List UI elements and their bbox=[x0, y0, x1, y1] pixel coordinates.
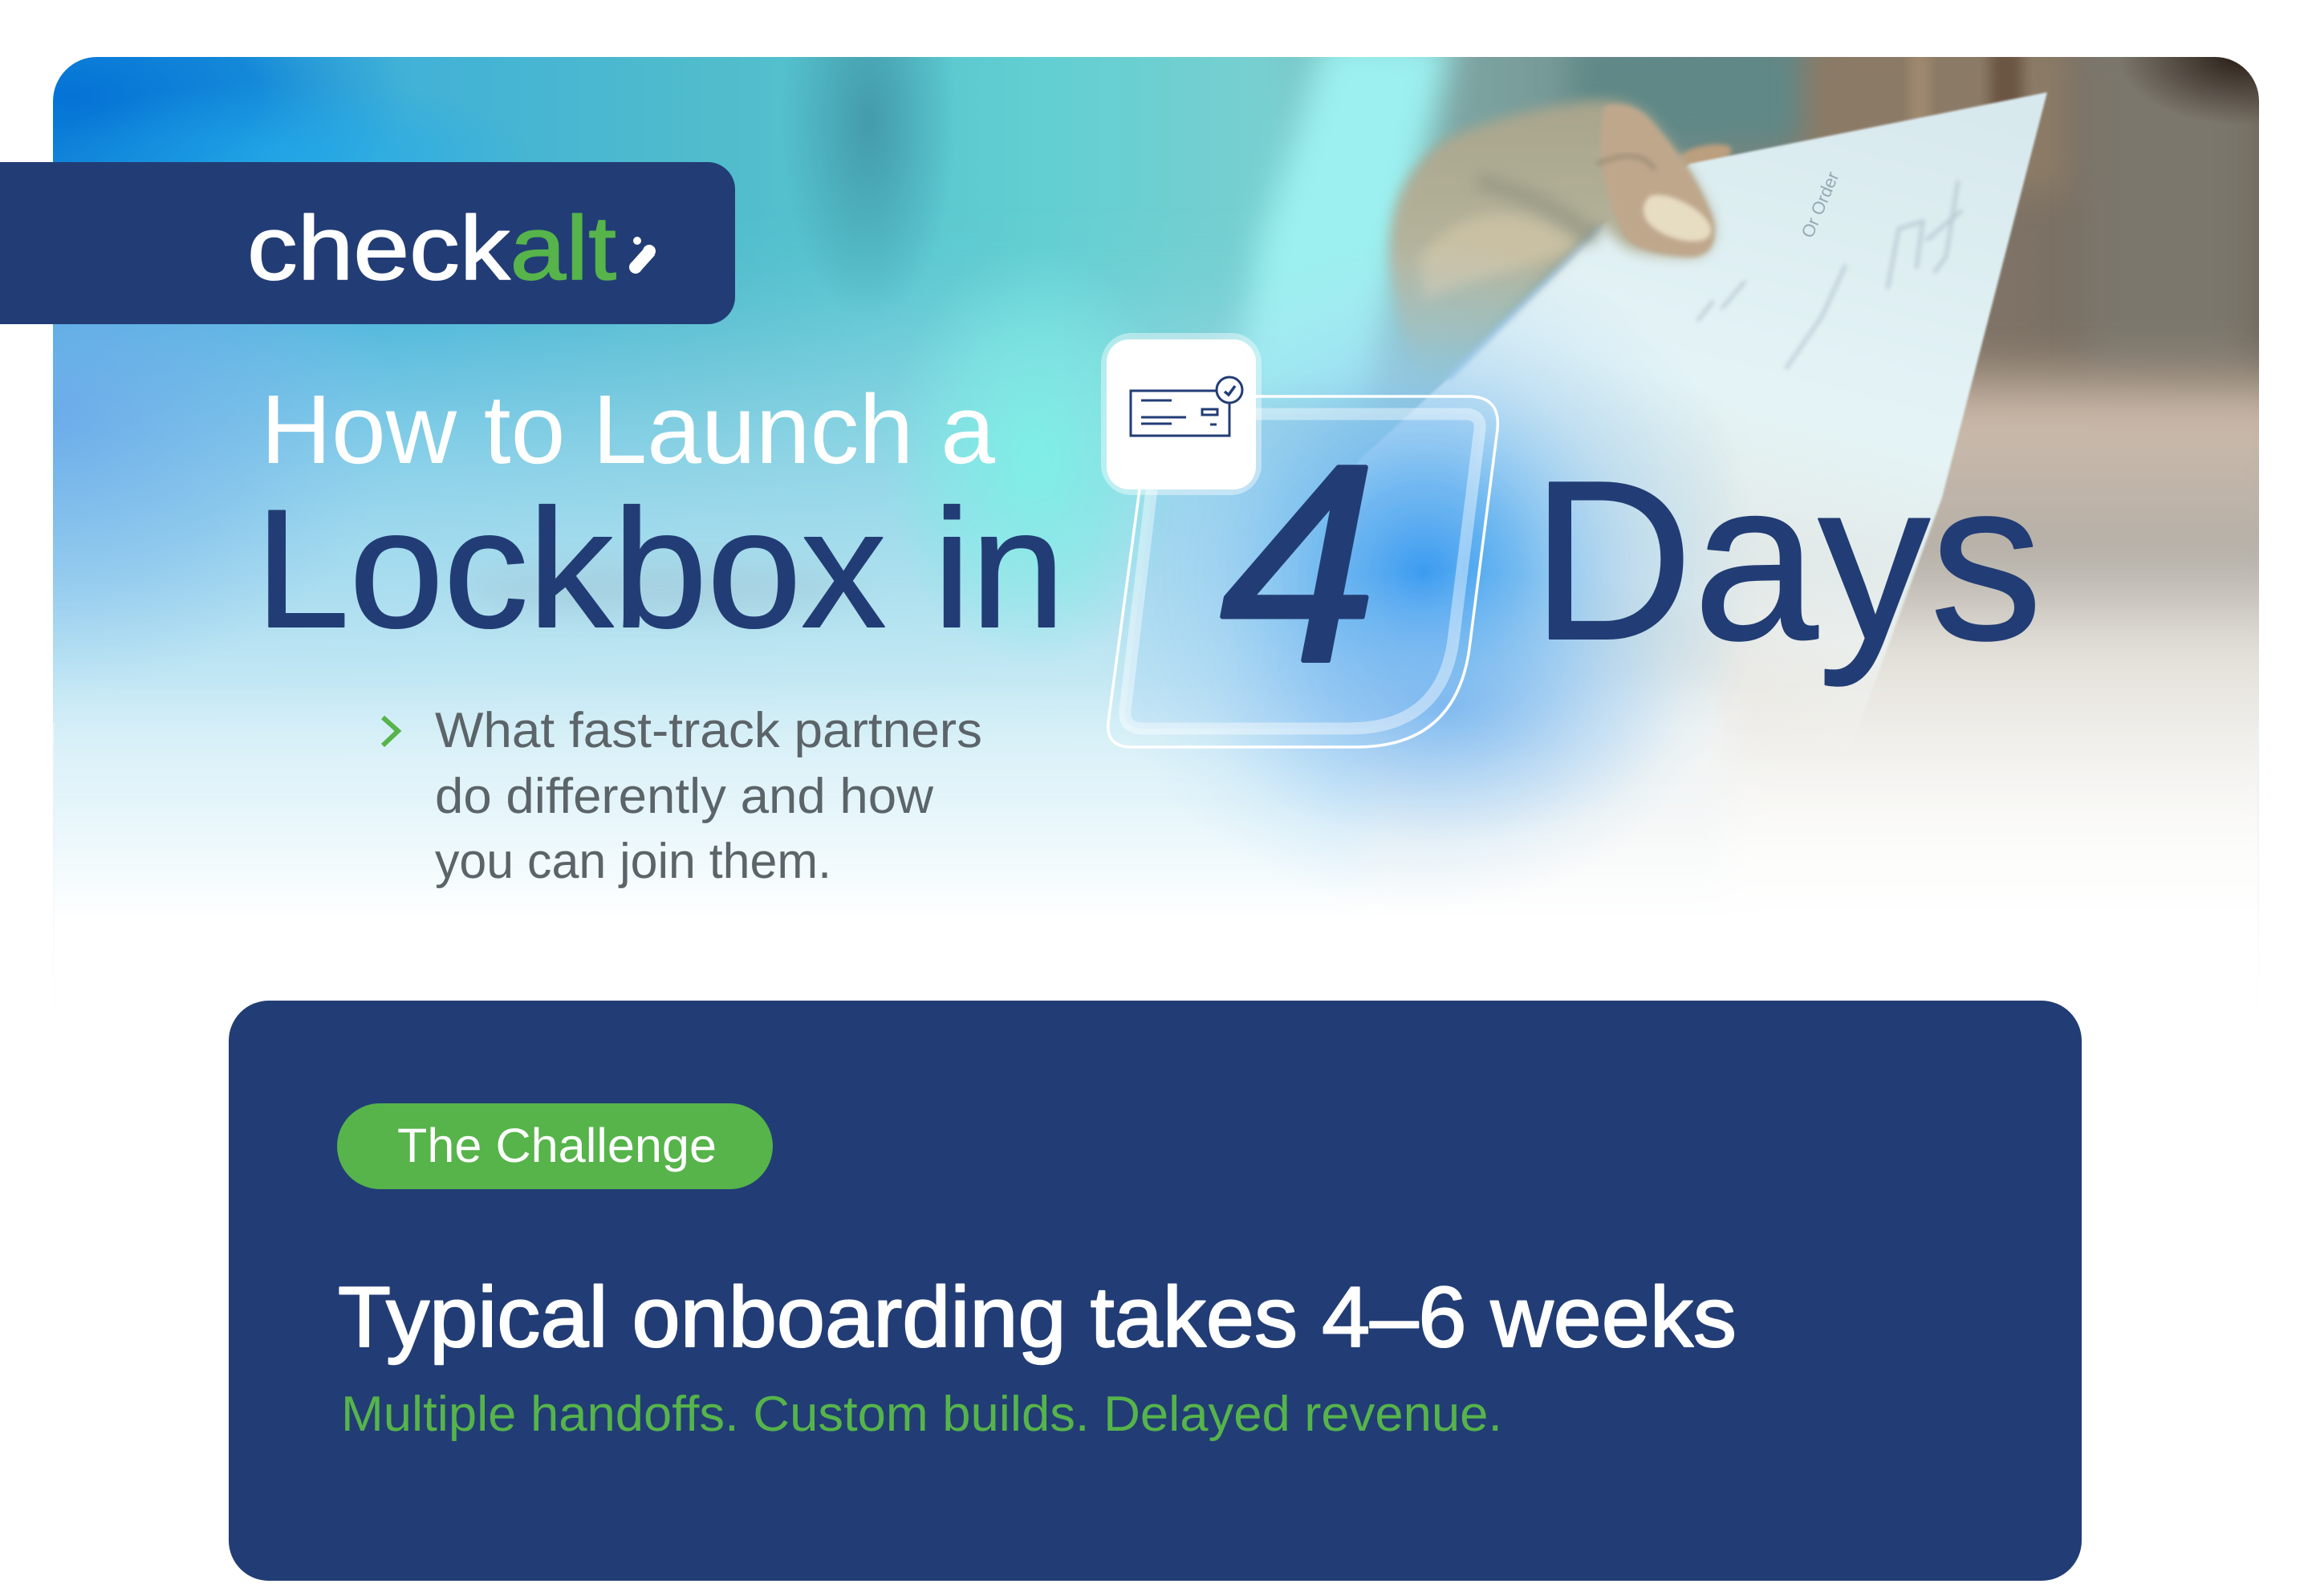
background browns bbox=[1573, 40, 1814, 144]
sleeve bbox=[1236, 40, 1453, 401]
blue glow bbox=[1087, 238, 1761, 912]
hand bbox=[1390, 99, 1714, 393]
subtitle text: you can join them. bbox=[435, 834, 831, 889]
challenge pill bbox=[337, 1103, 773, 1189]
title word Days: Days bbox=[1531, 433, 2042, 688]
cheque label: Or Order bbox=[1798, 169, 1843, 241]
panel: hero photo background bbox=[53, 57, 2259, 913]
challenge subheading: Multiple handoffs. Custom builds. Delayed revenue. bbox=[341, 1387, 1502, 1442]
challenge pill: The Challenge bbox=[397, 1119, 717, 1172]
panel: the challenge bbox=[229, 1001, 2082, 1581]
back finger bbox=[1679, 141, 1733, 167]
big number 4: 4 bbox=[1221, 407, 1377, 721]
icon: cheque with check mark bbox=[1131, 377, 1242, 436]
thumbnail bbox=[1644, 195, 1711, 242]
logo wordmark: check alt bbox=[247, 197, 616, 298]
cheque print bbox=[1697, 181, 1962, 369]
challenge heading: Typical onboarding takes 4–6 weeks bbox=[338, 1269, 1737, 1365]
title line two: Lockbox in bbox=[255, 474, 1065, 663]
subtitle text: What fast-track partners bbox=[435, 703, 982, 758]
glass frame around the 4 bbox=[1108, 396, 1497, 747]
icon card: cheque bbox=[1101, 333, 1262, 495]
panel: logo bar bbox=[0, 162, 735, 324]
subtitle text: do differently and how bbox=[435, 769, 933, 824]
card side edges bbox=[54, 722, 2258, 1043]
left pale wash bbox=[53, 286, 1471, 913]
logo mark bbox=[629, 237, 656, 274]
paper cheque bbox=[1358, 91, 2048, 695]
subtitle bullet chevron bbox=[383, 717, 398, 745]
subtitle text bbox=[435, 703, 982, 889]
title line one: How to Launch a bbox=[261, 375, 995, 484]
lower fill behind paper bbox=[1387, 558, 1748, 912]
desk bbox=[1733, 347, 2259, 745]
